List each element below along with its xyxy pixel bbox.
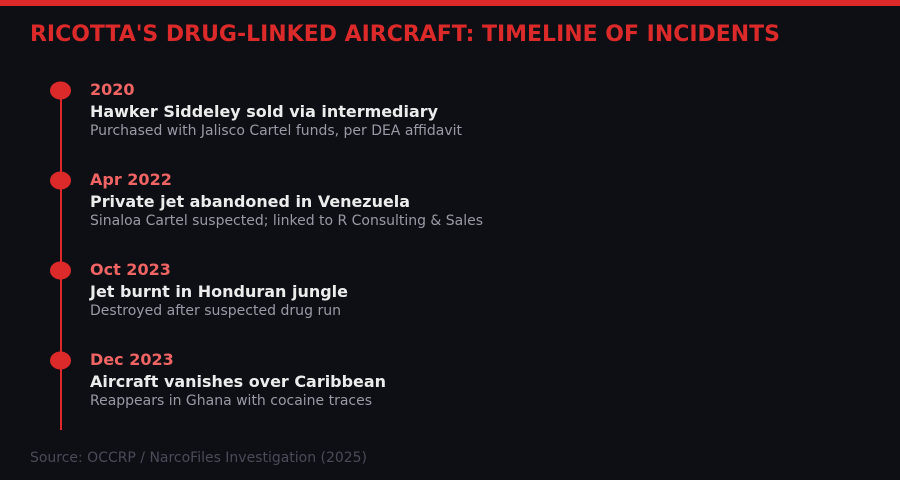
event: Dec 2023: Aircraft vanishes over Caribbean	[90, 372, 386, 391]
title: RICOTTA'S DRUG-LINKED AIRCRAFT: TIMELINE OF INCIDENTS	[30, 22, 780, 47]
event: 2020: 2020	[90, 80, 135, 99]
event: 2020: Purchased with Jalisco Cartel funds, per DEA affidavit	[90, 123, 462, 139]
source: Source: OCCRP / NarcoFiles Investigation (2025)	[30, 450, 367, 466]
event: Dec 2023	[50, 350, 386, 409]
event: Dec 2023: Dec 2023	[90, 350, 174, 369]
event: 2020: Hawker Siddeley sold via intermediary	[90, 102, 439, 121]
timeline line	[60, 90, 62, 430]
event: Oct 2023: Jet burnt in Honduran jungle	[89, 282, 348, 301]
event: Apr 2022: Apr 2022	[90, 170, 172, 189]
event: Oct 2023: Oct 2023	[90, 260, 171, 279]
event: Oct 2023	[50, 260, 348, 319]
event: 2020	[50, 80, 462, 139]
event: Oct 2023: Destroyed after suspected drug run	[90, 303, 341, 319]
event: Apr 2022: Sinaloa Cartel suspected; linked to R Consulting & Sales	[90, 213, 483, 229]
event: Apr 2022: Private jet abandoned in Venezuela	[90, 192, 410, 211]
event: Dec 2023: Reappears in Ghana with cocaine traces	[90, 393, 372, 409]
event: Apr 2022	[50, 170, 483, 229]
